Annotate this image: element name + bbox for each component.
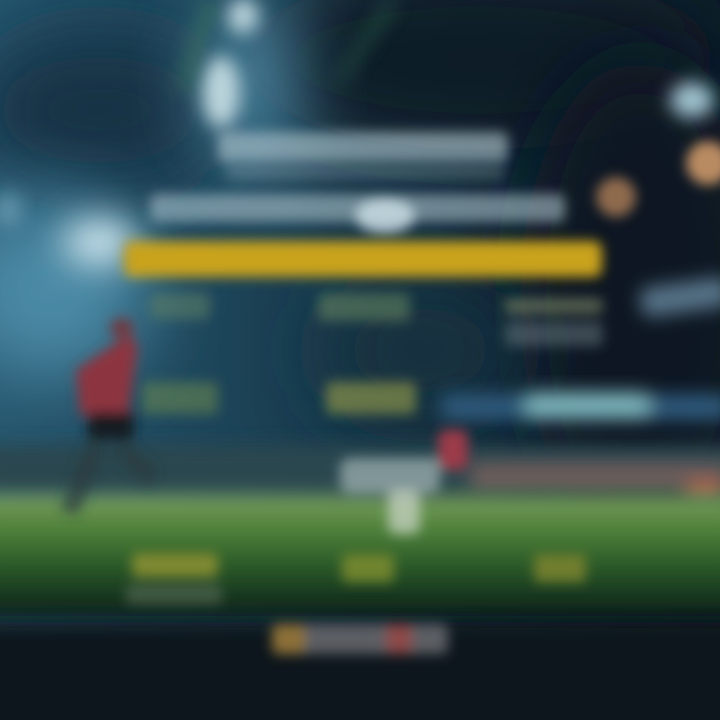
player left xyxy=(60,318,158,515)
pitch stat blocks xyxy=(126,553,586,604)
crowd strip xyxy=(0,445,720,495)
orange bokeh lights xyxy=(596,141,720,217)
player right xyxy=(340,430,468,534)
pitch xyxy=(0,494,720,619)
title line 2 xyxy=(225,167,505,179)
table column labels, row 1 xyxy=(150,293,603,346)
blue streak band xyxy=(440,392,720,420)
yellow banner xyxy=(124,241,602,277)
footer logo strip xyxy=(272,624,448,654)
bottom dark band xyxy=(0,622,720,720)
title: blurred heading xyxy=(150,132,565,234)
stadium light beam xyxy=(202,0,259,128)
green light streak xyxy=(175,0,220,90)
title line 3 xyxy=(150,194,565,222)
table row 2 xyxy=(142,382,416,414)
blurred left light xyxy=(0,192,23,228)
right side blurred lights xyxy=(638,82,720,318)
title line 1 xyxy=(218,132,508,162)
left flare glow xyxy=(62,218,138,266)
